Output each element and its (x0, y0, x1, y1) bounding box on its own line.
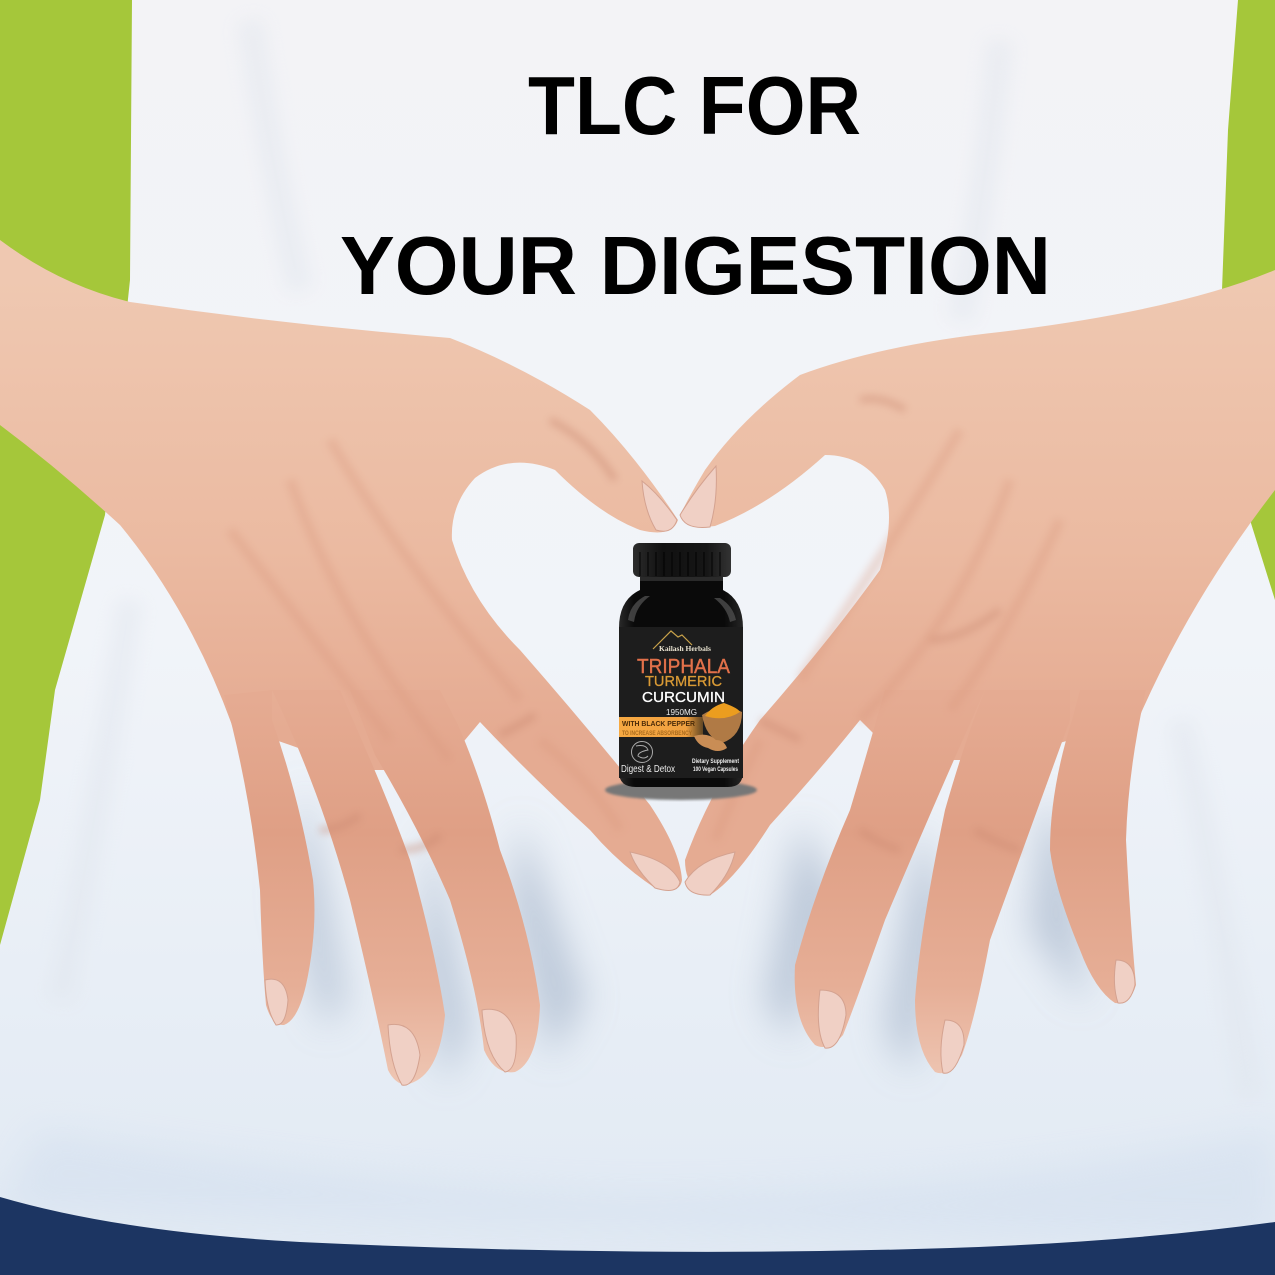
right pinky finger (1050, 690, 1146, 1003)
left ring finger (272, 690, 445, 1084)
left hand and arm (0, 240, 682, 1085)
right nails (680, 466, 1135, 1073)
supplement facts: 100 Vegan Capsules (693, 766, 738, 773)
right middle finger (795, 690, 985, 1047)
finger shadows on shirt (290, 780, 1085, 1085)
dosage: 1950MG (666, 707, 697, 717)
band text (622, 719, 696, 737)
left knuckle crease (320, 420, 615, 850)
title line 1: TLC FOR (528, 59, 861, 152)
Curcumin: CURCUMIN (642, 689, 725, 706)
orange band (619, 717, 703, 737)
Triphala: TRIPHALA (637, 656, 731, 678)
product bottle (605, 543, 757, 800)
bottle cap (633, 543, 731, 581)
right knuckle crease (760, 399, 1020, 850)
left hand tendon shading (230, 440, 620, 830)
supplement facts (692, 758, 739, 773)
right hand tendon shading (715, 430, 1060, 840)
brand name: Kailash Herbals (659, 644, 711, 653)
turmeric bowl (694, 703, 742, 751)
title line 2: YOUR DIGESTION (340, 219, 1051, 312)
brand mountain logo (653, 631, 692, 649)
title (340, 59, 1051, 312)
band text: WITH BLACK PEPPER (622, 719, 696, 728)
bottle label (619, 627, 743, 778)
left palm, arm and thumb (0, 240, 682, 890)
shoulder highlight (628, 596, 736, 622)
Turmeric: TURMERIC (645, 673, 722, 690)
left middle finger (350, 690, 540, 1072)
right ring finger (915, 690, 1070, 1073)
left pinky finger (224, 690, 314, 1025)
navy jeans (0, 1197, 1275, 1275)
bottle ground shadow (605, 780, 757, 800)
digest and detox: Digest & Detox (621, 763, 676, 775)
right palm, arm and thumb (680, 270, 1275, 895)
right hand and arm (680, 270, 1275, 1073)
supplement facts: Dietary Supplement (692, 758, 739, 765)
left nails (265, 481, 680, 1085)
band text: TO INCREASE ABSORBENCY (622, 731, 692, 737)
gut icon (632, 742, 652, 762)
bottle body (619, 577, 743, 787)
